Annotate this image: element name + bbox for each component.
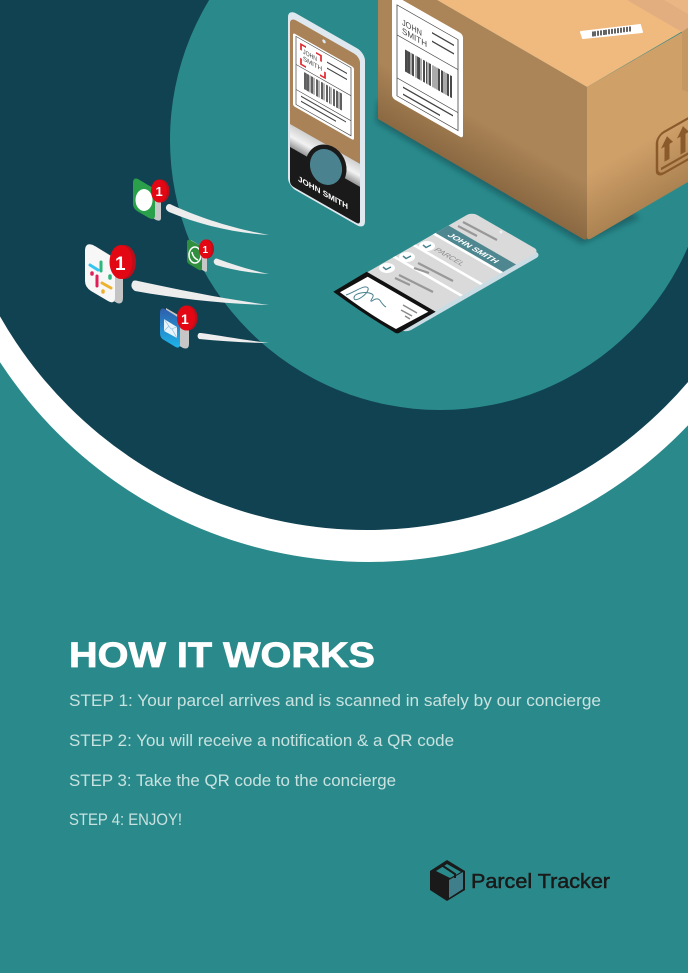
logo wordmark: Parcel Tracker [471,870,610,893]
inner teal circle [170,0,688,410]
notification badge: 1 [115,254,126,275]
camera cut-out [298,138,354,196]
notification badge: 1 [202,245,208,256]
step 3: STEP 3: Take the QR code to the concierge [69,772,396,790]
signature card [333,272,436,333]
phone scanning the label: SMITH [303,56,322,73]
phone scanning the label: JOHN [303,49,317,63]
signature [346,287,386,307]
this way up icon [657,113,688,177]
step 1: STEP 1: Your parcel arrives and is scanned in safely by our concierge [69,692,601,710]
phone name text: JOHN SMITH [298,174,348,211]
phone with delivery list and signature: PARCEL [432,247,467,267]
icon: hexagon parcel [430,860,465,901]
icon: mail [160,306,198,348]
box shipping label: JOHN [402,17,422,38]
step 2: STEP 2: You will receive a notification & a QR code [69,732,454,750]
phone with delivery list and signature: JOHN SMITH [445,232,502,265]
icon: whatsapp [187,240,214,272]
check marks [379,241,435,273]
notification badge: 1 [156,184,163,199]
navy circle [0,0,688,530]
notification badge: 1 [181,311,189,327]
box shipping label [392,0,463,138]
phone with delivery list and signature [333,212,542,333]
white crescent [0,0,688,562]
top barcode sticker [581,25,642,38]
box shipping label: SMITH [402,26,427,49]
title: HOW IT WORKS [69,636,375,675]
phone scanning the label [288,9,365,230]
steps list [69,692,601,829]
icon: messages app [133,178,170,221]
step 4: STEP 4: ENJOY! [69,811,182,829]
list placeholder lines [395,222,497,292]
red scan corners [301,44,325,78]
cardboard box [376,0,688,244]
icon: slack [85,244,136,303]
motion streaks [131,204,269,343]
Parcel Tracker logo [430,860,610,901]
